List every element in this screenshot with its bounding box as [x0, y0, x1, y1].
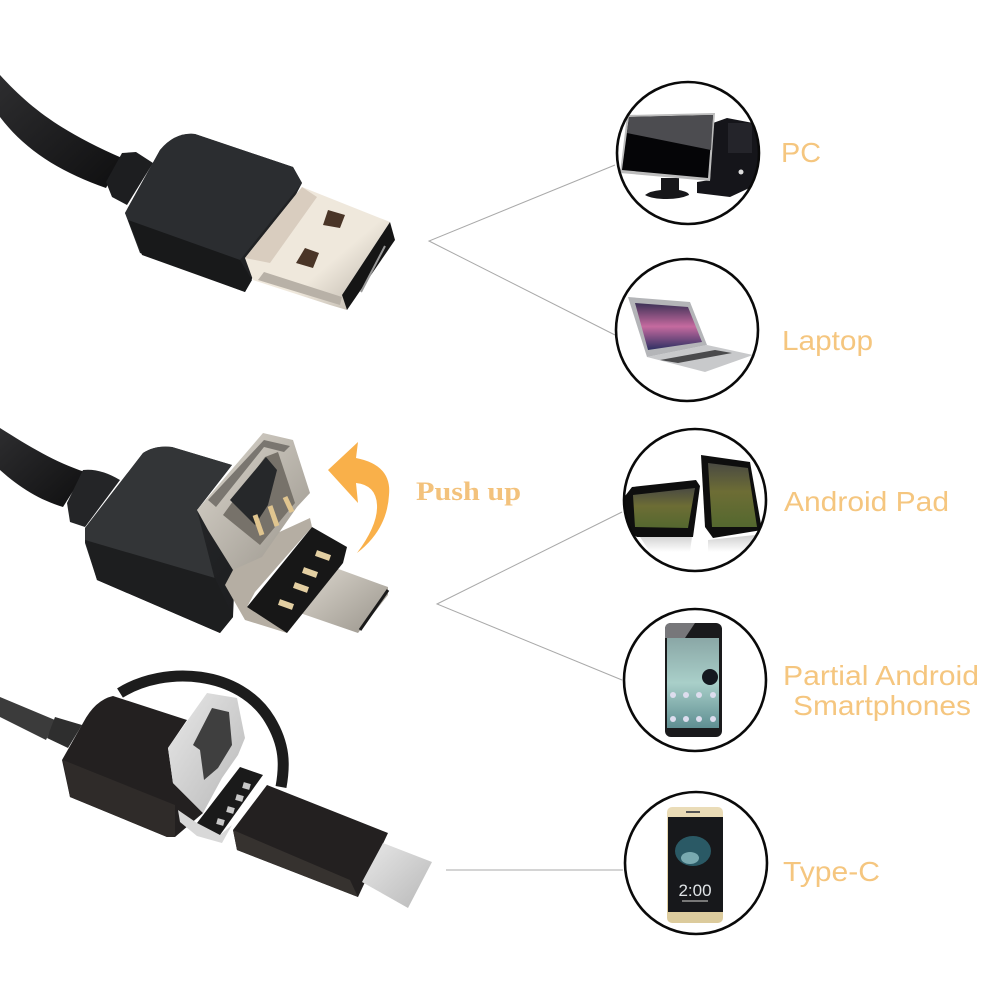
device: Android smartphone [624, 609, 766, 751]
icon: right tablet [701, 455, 762, 538]
device: PC [617, 82, 760, 224]
icon: gold phone body [667, 807, 723, 923]
left tablet screen [633, 488, 695, 528]
ring: Android Pad [624, 429, 766, 571]
icon: left tablet [622, 480, 700, 537]
Micro USB connector photo with USB folded up [0, 428, 388, 633]
phone screen [668, 817, 723, 912]
label: Android Pad: Android Pad [784, 486, 949, 517]
phone screen [667, 638, 719, 728]
icon: laptop screen [635, 303, 702, 350]
label: Laptop: Laptop [782, 325, 873, 356]
push up arrow [328, 442, 389, 553]
clock text: 2:00 [678, 881, 712, 900]
ring: Type-C [625, 792, 767, 934]
Type-C connector photo with loop [0, 676, 432, 908]
ring: smartphone [624, 609, 766, 751]
icon: laptop base [647, 345, 753, 372]
device: Type-C phone [625, 792, 767, 934]
label: Partial Android Smartphones: Smartphones [793, 690, 971, 721]
right tablet screen [708, 463, 757, 527]
icon: monitor [620, 113, 715, 181]
connector line: Type-C [446, 869, 623, 871]
label: Type-C: Type-C [783, 856, 880, 887]
device: Laptop [616, 259, 758, 401]
connector lines: USB to PC and Laptop [429, 165, 615, 335]
label: PC: PC [781, 137, 821, 168]
icon: monitor stand [645, 178, 689, 199]
icon: laptop lid [628, 297, 707, 357]
connector lines: Micro USB to Pad and Smartphones [437, 512, 622, 680]
push up label: Push up [416, 477, 521, 506]
ring: PC [617, 82, 759, 224]
icon: phone body [665, 623, 722, 737]
device: Android Pad [622, 429, 766, 571]
ring: Laptop [616, 259, 758, 401]
label: Partial Android Smartphones [783, 660, 979, 721]
icon: laptop keyboard [660, 350, 732, 363]
icon: computer tower [697, 118, 760, 197]
tablet reflections [640, 535, 755, 549]
label: Partial Android Smartphones: Partial Android [783, 660, 979, 691]
USB-A connector photo [0, 75, 395, 310]
